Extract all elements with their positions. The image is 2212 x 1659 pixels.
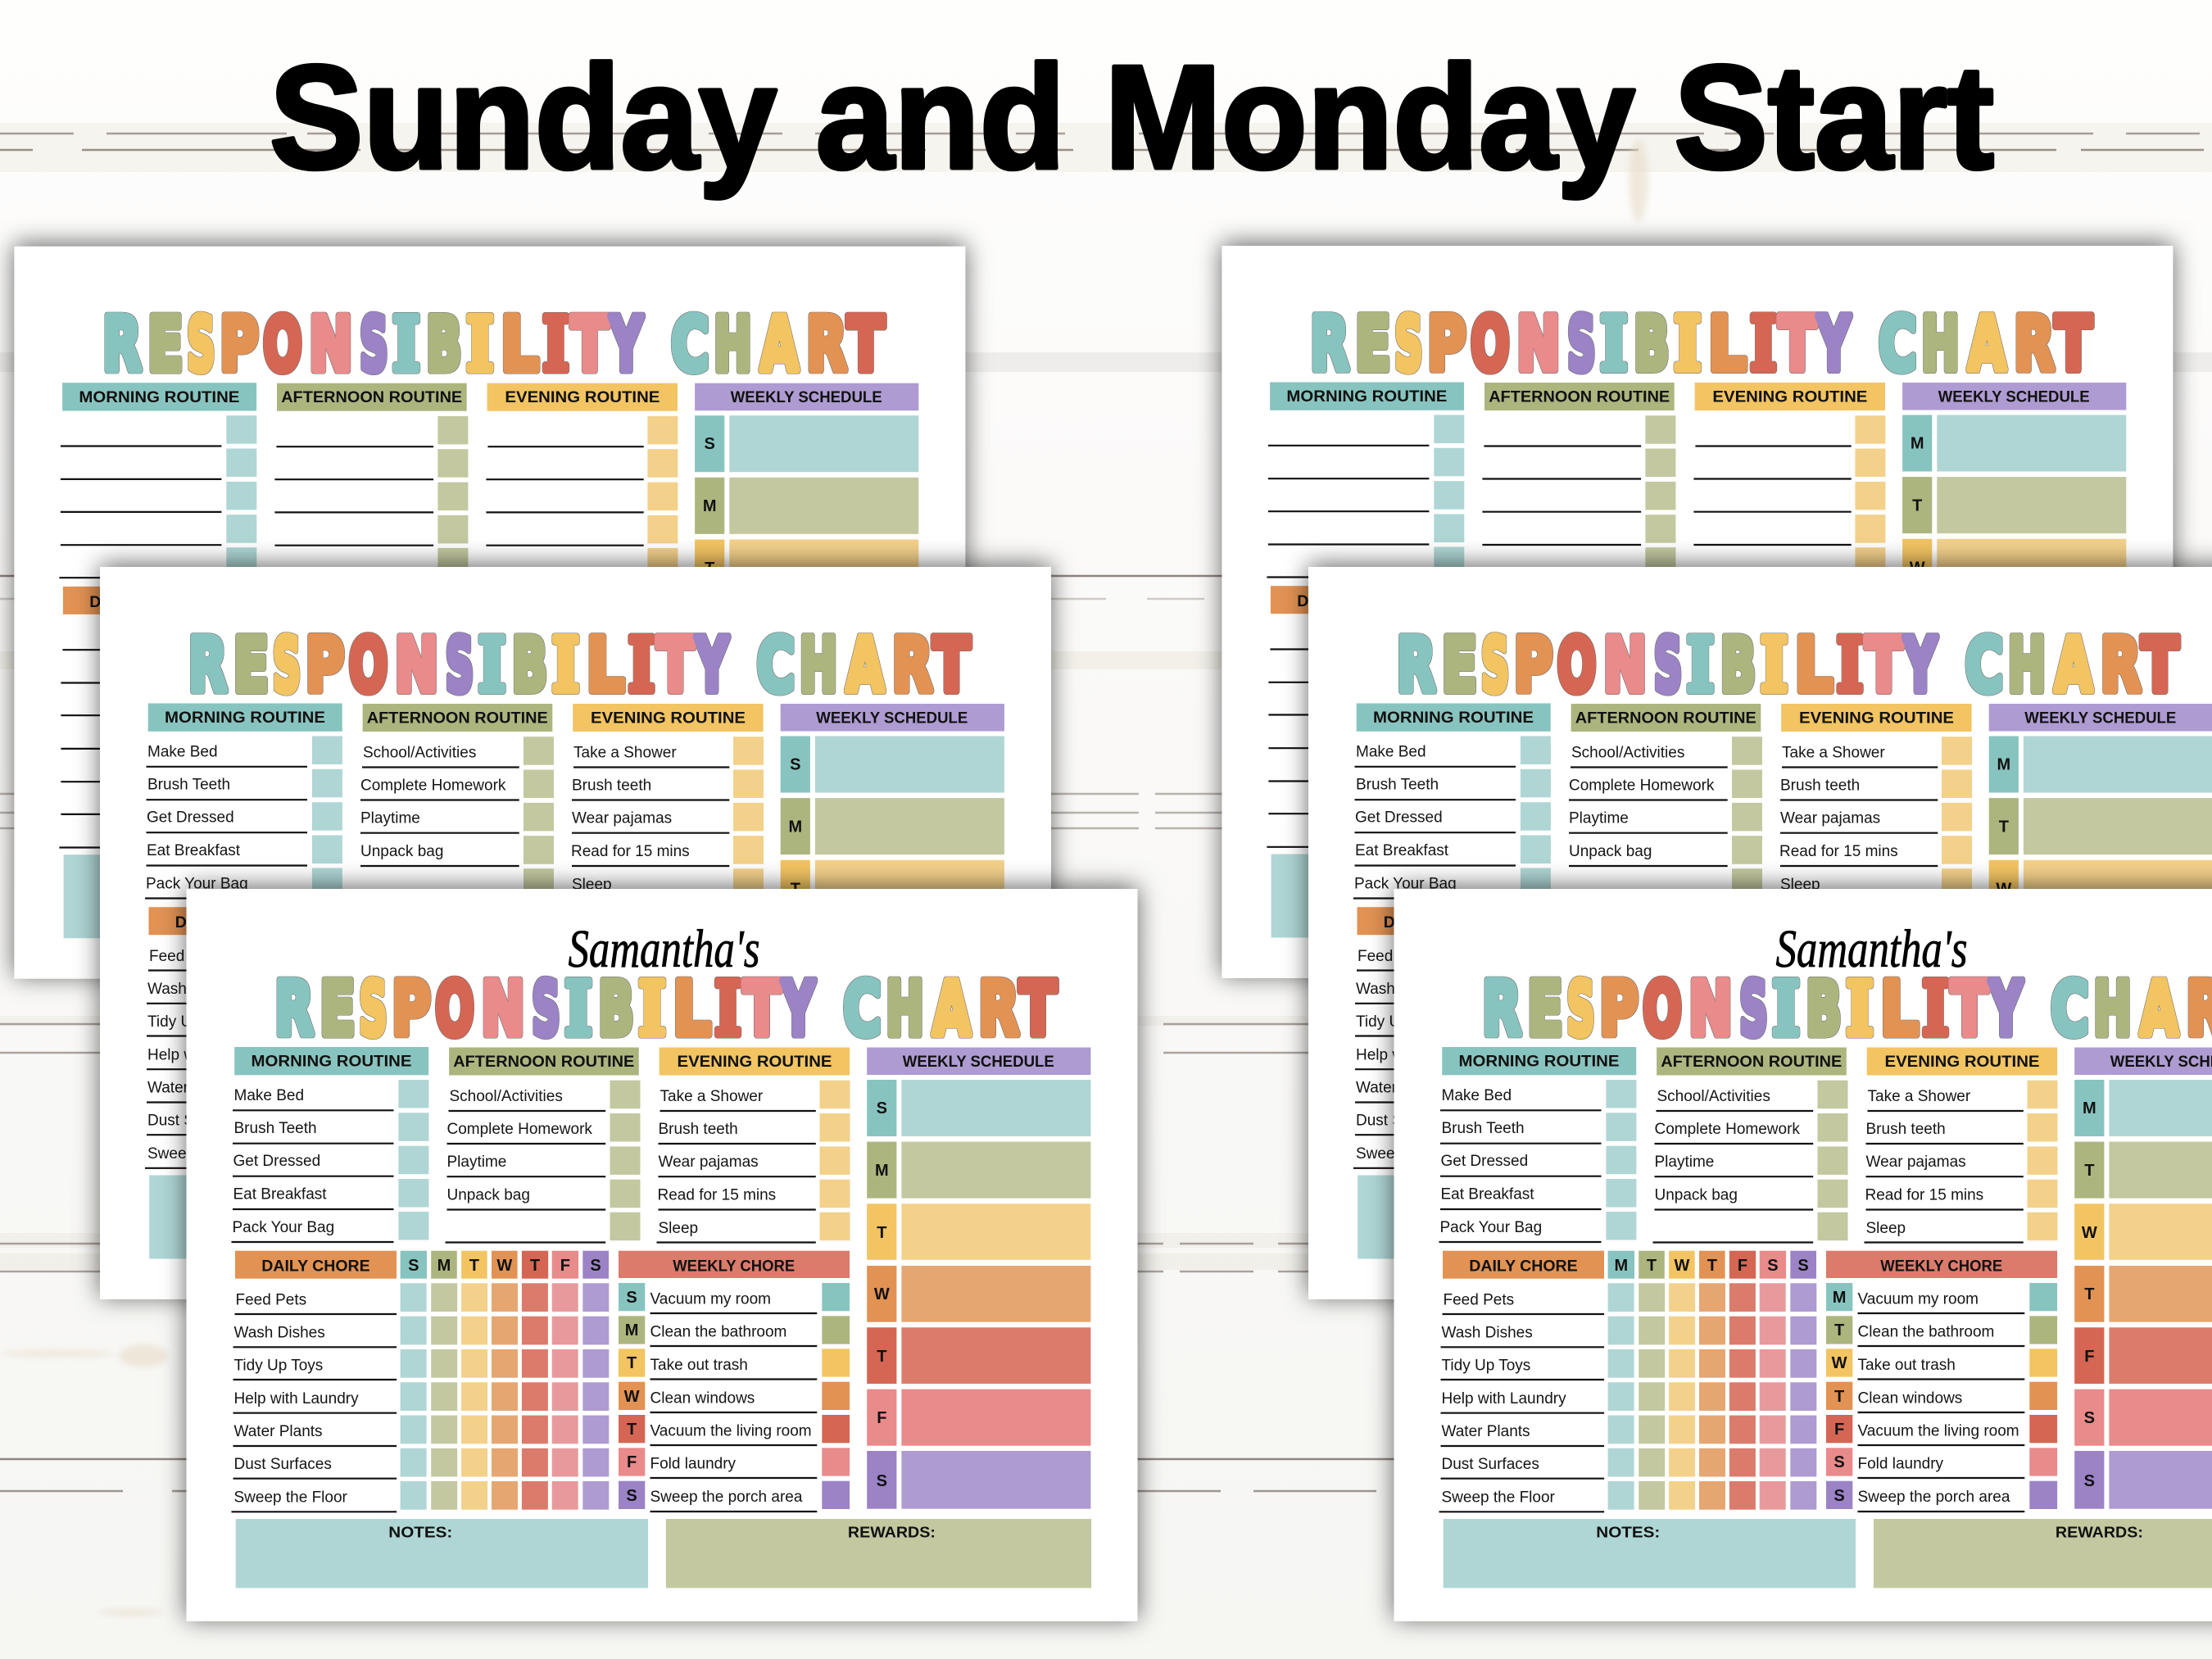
chart heading xyxy=(1483,965,2212,1052)
evening tasks xyxy=(1865,1088,1983,1237)
daily chore table xyxy=(1439,1251,1816,1512)
morning routine column xyxy=(1353,703,1551,898)
panel: personalised Sunday-start chart, front xyxy=(187,889,1137,1621)
chart heading xyxy=(188,622,970,709)
weekly schedule day letters xyxy=(1910,434,1925,826)
title: Sunday and Monday Start xyxy=(270,35,1994,200)
evening routine column xyxy=(1865,1047,2058,1242)
weekly chore day letters xyxy=(624,1289,640,1505)
afternoon routine column xyxy=(359,704,554,899)
weekly chore day letters xyxy=(1832,1289,1847,1505)
weekly schedule day letters xyxy=(702,435,718,826)
morning routine column xyxy=(59,383,256,578)
evening tasks xyxy=(571,744,690,893)
weekly schedule day letters xyxy=(787,755,803,1147)
morning routine column xyxy=(1439,1047,1636,1242)
chart contents xyxy=(59,301,918,938)
weekly schedule xyxy=(781,704,1004,1165)
daily chore table xyxy=(145,907,523,1168)
morning routine column xyxy=(231,1047,428,1242)
afternoon tasks xyxy=(1655,1088,1800,1204)
afternoon tasks xyxy=(447,1088,592,1204)
afternoon routine column xyxy=(446,1047,641,1242)
evening routine column xyxy=(484,383,678,578)
daily chore day letters xyxy=(236,592,429,610)
morning tasks xyxy=(146,744,248,893)
evening routine column xyxy=(570,704,764,899)
evening tasks xyxy=(657,1088,776,1237)
panel: personalised Monday-start chart, front xyxy=(1394,889,2212,1621)
evening routine column xyxy=(1779,704,1972,899)
daily chore table xyxy=(1267,586,1644,847)
weekly schedule xyxy=(2074,1047,2212,1509)
weekly schedule xyxy=(1989,704,2212,1165)
morning tasks xyxy=(233,1087,334,1236)
morning routine column xyxy=(1267,382,1464,577)
afternoon tasks xyxy=(1569,744,1715,860)
morning tasks xyxy=(1440,1087,1542,1236)
daily chore table xyxy=(59,587,437,847)
afternoon tasks xyxy=(360,744,506,860)
panel: blank Monday-start chart, back xyxy=(1222,246,2173,978)
afternoon routine column xyxy=(1567,704,1762,899)
daily chore day letters xyxy=(322,913,514,931)
chart heading xyxy=(102,301,884,388)
daily chore day letters xyxy=(1529,913,1723,931)
daily chore tasks xyxy=(147,948,273,1163)
child name: Samantha's xyxy=(1776,919,1968,979)
chart contents xyxy=(145,622,1004,1258)
afternoon routine column xyxy=(273,383,468,578)
weekly chore table xyxy=(619,1251,850,1512)
weekly schedule xyxy=(695,383,918,845)
weekly schedule xyxy=(1902,383,2126,844)
notes box xyxy=(1358,1175,1770,1258)
weekly schedule day letters xyxy=(874,1099,890,1490)
daily chore day letters xyxy=(1614,1257,1809,1275)
card sheet xyxy=(1308,567,2212,1299)
rewards box xyxy=(666,1519,1091,1588)
card sheet xyxy=(14,247,965,979)
notes box xyxy=(64,854,476,938)
panel: filled Monday-start chart, middle xyxy=(1308,567,2212,1299)
panel: filled Sunday-start chart, middle xyxy=(100,567,1051,1299)
morning tasks xyxy=(1354,744,1457,893)
card sheet xyxy=(1394,889,2212,1621)
daily chore day letters xyxy=(1442,592,1637,610)
morning routine column xyxy=(145,703,342,898)
notes box xyxy=(1444,1519,1856,1588)
afternoon routine column xyxy=(1480,383,1675,578)
notes box xyxy=(149,1175,562,1258)
daily chore table xyxy=(1353,907,1731,1168)
chart heading xyxy=(1310,301,2092,388)
evening routine column xyxy=(1692,383,1885,578)
weekly schedule day letters xyxy=(2082,1099,2097,1490)
rewards box xyxy=(1874,1519,2212,1588)
child name: Samantha's xyxy=(569,919,760,979)
chart contents xyxy=(1353,622,2212,1258)
weekly chore tasks xyxy=(1858,1291,2019,1506)
notes box xyxy=(1271,854,1684,937)
daily chore tasks xyxy=(1356,948,1481,1163)
chart heading xyxy=(275,965,1057,1052)
weekly schedule xyxy=(867,1047,1090,1509)
evening tasks xyxy=(1779,744,1898,893)
chart heading xyxy=(1397,622,2178,709)
daily chore tasks xyxy=(1442,1292,1566,1506)
weekly chore table xyxy=(1826,1251,2057,1512)
card sheet xyxy=(187,889,1137,1621)
panel: blank Sunday-start chart, back xyxy=(14,247,965,979)
card sheet xyxy=(100,567,1051,1299)
chart contents xyxy=(1267,301,2126,937)
evening routine column xyxy=(657,1047,850,1242)
daily chore day letters xyxy=(408,1257,601,1275)
afternoon routine column xyxy=(1653,1047,1848,1242)
daily chore tasks xyxy=(234,1292,359,1506)
daily chore table xyxy=(231,1251,609,1512)
notes box xyxy=(236,1519,648,1588)
card sheet xyxy=(1222,246,2173,978)
weekly schedule day letters xyxy=(1996,755,2011,1147)
weekly chore tasks xyxy=(650,1291,812,1506)
